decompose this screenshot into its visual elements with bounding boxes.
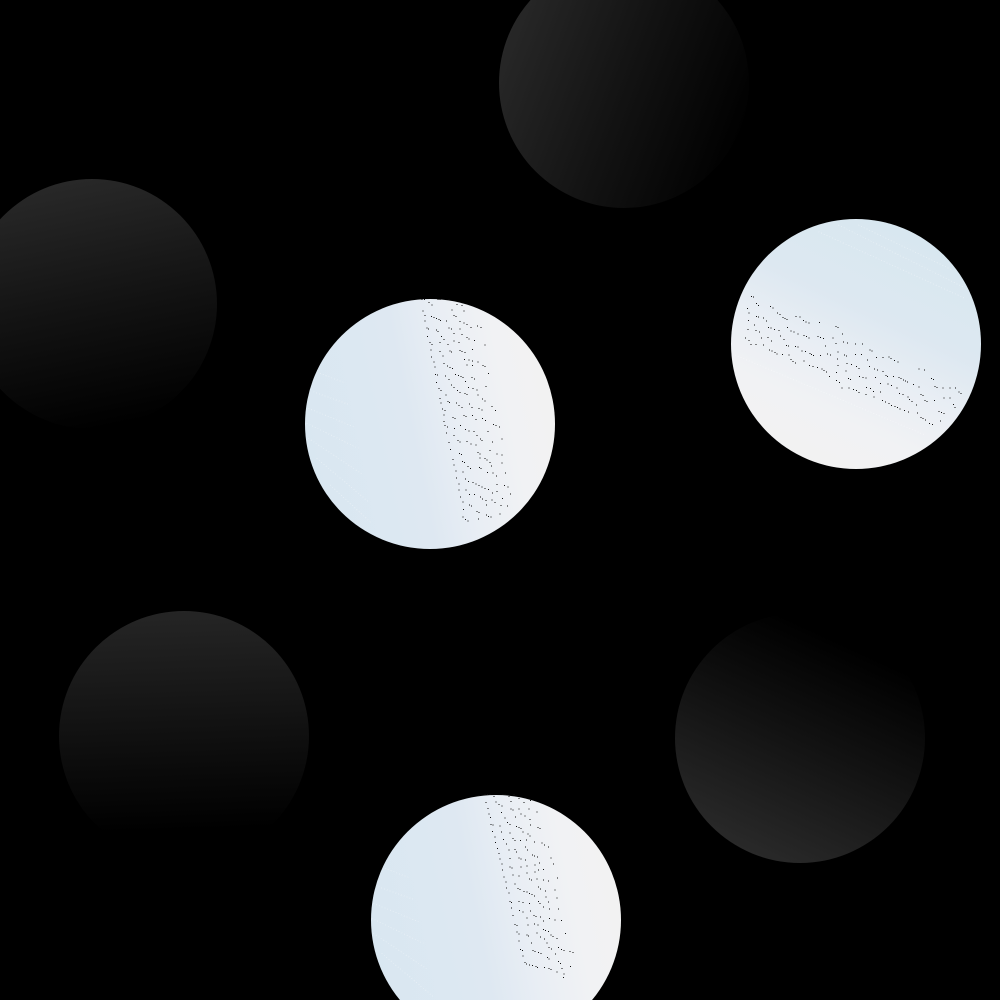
dark circle: top centre [499,0,749,208]
light circle: centre [305,299,555,549]
light circle: upper right [731,219,981,469]
dark circle: bottom right [675,613,925,863]
light circle: bottom [371,795,621,1000]
dark circle: bottom left [59,611,309,861]
dark circle: left [0,179,217,429]
